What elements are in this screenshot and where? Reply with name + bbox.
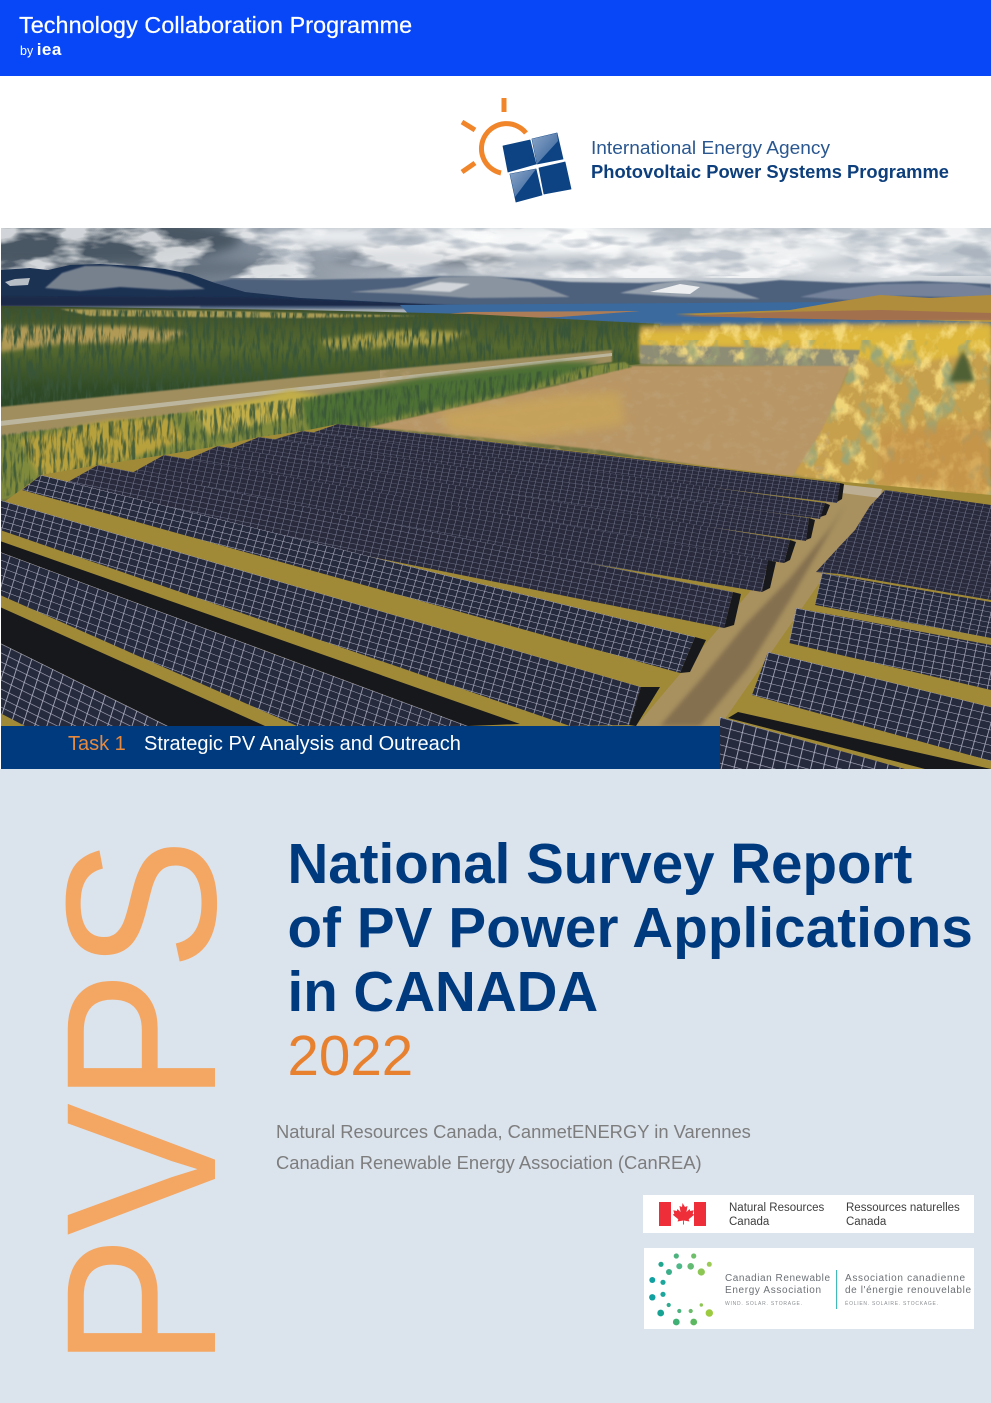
land base xyxy=(0,300,991,769)
logo text: Photovoltaic Power Systems Programme: Photovoltaic Power Systems Programme xyxy=(591,161,949,182)
dry meadow with yellow saplings xyxy=(367,366,850,480)
task label: Task 1 xyxy=(68,733,126,755)
cover photo: solar farm in autumn landscape xyxy=(1,228,991,769)
logo: Canadian Renewable Energy Association xyxy=(644,1248,974,1329)
icon: dot ring xyxy=(649,1253,713,1325)
logo text: French: Association canadienne xyxy=(845,1273,965,1284)
logo text: French: de l'énergie renouvelable xyxy=(845,1285,971,1296)
authoring organisations: Canadian Renewable Energy Association (CanREA) xyxy=(276,1152,702,1173)
logo text: English: WIND. SOLAR. STORAGE. xyxy=(725,1301,802,1307)
logo text: French xyxy=(845,1273,971,1307)
PVPS logo xyxy=(460,98,949,202)
vertical PVPS wordmark: PVPS xyxy=(22,838,261,1368)
report title: in CANADA xyxy=(288,960,598,1023)
logo text: English: Natural Resources xyxy=(729,1202,824,1214)
icon: Canadian flag xyxy=(659,1202,706,1226)
golden aspen stands on the right xyxy=(630,320,991,510)
mountains xyxy=(0,264,991,312)
logo text: International Energy Agency: International Energy Agency xyxy=(591,137,831,158)
authoring organisations xyxy=(276,1121,751,1173)
dark shadows between rows xyxy=(0,483,991,769)
authoring organisations: Natural Resources Canada, CanmetENERGY in Varennes xyxy=(276,1121,751,1142)
logo: Natural Resources Canada xyxy=(643,1195,974,1233)
ground beneath the array xyxy=(0,424,991,769)
logo text: French: ÉOLIEN. SOLAIRE. STOCKAGE. xyxy=(845,1300,938,1307)
report title: 2022 xyxy=(288,1024,413,1087)
mixed trees above the array xyxy=(0,360,640,500)
logo text: English: Energy Association xyxy=(725,1285,821,1296)
right solar array rows xyxy=(720,490,991,769)
conifer forest xyxy=(1,306,660,408)
icon: solar panel xyxy=(503,133,571,202)
logo text: English xyxy=(725,1273,830,1307)
service track xyxy=(636,484,884,726)
logo text: French: Canada xyxy=(846,1216,887,1228)
lower cover panel xyxy=(0,769,991,1403)
banner subtitle: by iea: by iea xyxy=(20,40,62,59)
task bar xyxy=(1,726,720,769)
icon: sun xyxy=(462,98,526,173)
report title: National Survey Report xyxy=(288,832,912,895)
logo text: French: Ressources naturelles xyxy=(846,1202,960,1214)
task description: Strategic PV Analysis and Outreach xyxy=(144,733,461,755)
banner title: Technology Collaboration Programme xyxy=(19,12,412,38)
road and verge xyxy=(0,350,612,444)
sky with clouds xyxy=(1,228,991,312)
left solar array rows xyxy=(0,424,840,726)
divider xyxy=(836,1270,837,1309)
logo text: English: Canadian Renewable xyxy=(725,1273,830,1284)
top banner: Technology Collaboration Programme xyxy=(0,0,991,76)
logo text: English: Canada xyxy=(729,1216,770,1228)
report title xyxy=(288,832,973,1087)
lake and golden hill xyxy=(390,295,991,326)
report title: of PV Power Applications xyxy=(288,896,973,959)
